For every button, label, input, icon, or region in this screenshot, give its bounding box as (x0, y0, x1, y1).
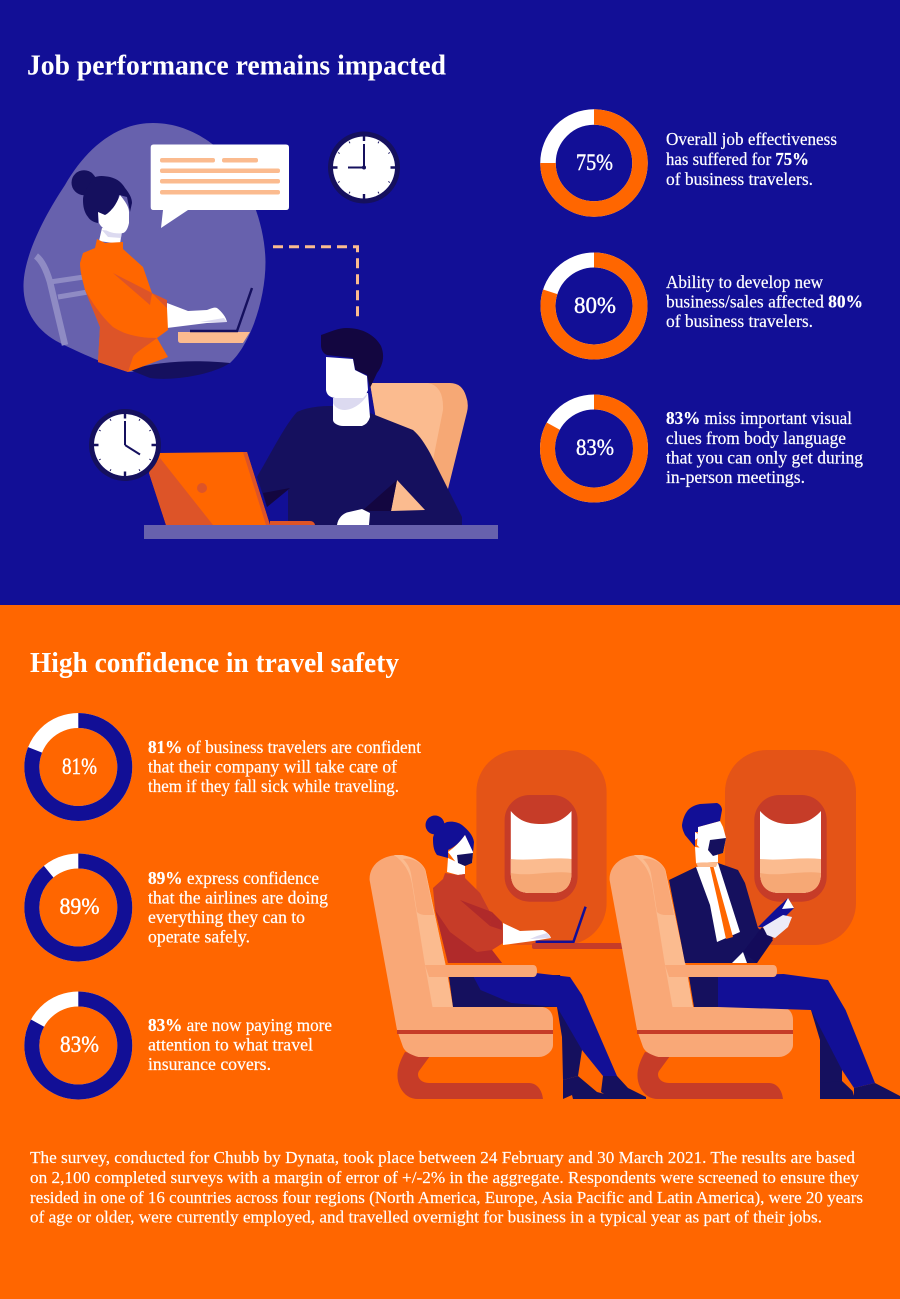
donut: 83% job: 83% (576, 435, 614, 460)
speech bubble (151, 144, 289, 228)
illustration: man passenger (669, 803, 900, 1099)
text: travel insurance: insurance covers. (148, 1054, 271, 1074)
clock: top (328, 132, 400, 204)
survey methodology note: of age or older, were currently employed, and travelled overnight for business in a typical year as part of their jobs. (30, 1208, 822, 1226)
text: job effectiveness: Overall job effectiveness (666, 129, 837, 149)
heading: job performance: Job performance remains impacted (27, 50, 446, 82)
illustration: woman on video call (23, 123, 266, 379)
armrest left (425, 965, 537, 977)
dashed connector arrow (273, 247, 358, 318)
text: new business ability: of business travelers. (666, 311, 813, 331)
text: job effectiveness: of business travelers. (666, 169, 813, 189)
text: travel insurance: attention to what travel (148, 1034, 313, 1054)
text: visual clues: 83% miss important visual (666, 408, 860, 428)
survey methodology note: The survey, conducted for Chubb by Dynata, took place between 24 February and 30 March 2021. The results are based (30, 1148, 855, 1167)
heading: travel safety: High confidence in travel safety (30, 648, 399, 679)
text: airline confidence: everything they can to (148, 907, 305, 927)
donut: 80% (548, 260, 640, 352)
text: visual clues: clues from body language (666, 428, 846, 448)
illustration: seat right (610, 855, 793, 1099)
illustration: seat left (370, 855, 553, 1099)
text: airline confidence: 89% express confidence (148, 868, 325, 888)
text: company care: them if they fall sick while traveling. (148, 776, 399, 796)
donut: 89%: 89% (60, 894, 100, 919)
text: new business ability: business/sales affected 80% (666, 292, 864, 312)
text: visual clues: in-person meetings. (666, 467, 805, 487)
donut: 83% job (548, 402, 640, 495)
tray table (532, 943, 624, 949)
survey methodology note: resided in one of 16 countries across four regions (North America, Europe, Asia Pacific and Latin America), were 20 years (30, 1188, 863, 1207)
panel: job performance (0, 0, 900, 605)
illustration: airplane window right (725, 750, 856, 945)
text: company care: that their company will take care of (148, 756, 397, 776)
text: new business ability: Ability to develop new (666, 272, 823, 292)
text: visual clues: that you can only get during (666, 448, 863, 468)
donut: 75% (548, 117, 640, 209)
donut: 81%: 81% (62, 754, 97, 779)
illustration: man at laptop (144, 328, 498, 539)
text: airline confidence: operate safely. (148, 926, 250, 946)
donut: 83% safety: 83% (60, 1032, 99, 1057)
illustration: airplane window left (476, 750, 607, 945)
donut: 89% (32, 861, 125, 954)
donut: 81% (32, 720, 125, 814)
survey methodology note: on 2,100 completed surveys with a margin of error of +/-2% in the aggregate. Respondents were screened to ensure they (30, 1168, 859, 1187)
armrest right (665, 965, 777, 977)
illustration: woman passenger (426, 816, 646, 1099)
panel: travel safety (0, 605, 900, 1299)
text: travel insurance: 83% are now paying more (148, 1015, 339, 1035)
clock: bottom (89, 409, 161, 481)
donut: 80%: 80% (574, 293, 616, 318)
text: company care: 81% of business travelers are confident (148, 737, 433, 757)
text: job effectiveness: has suffered for 75% (666, 149, 811, 169)
donut: 83% safety (32, 999, 125, 1092)
text: airline confidence: that the airlines are doing (148, 888, 328, 908)
donut: 75%: 75% (576, 150, 613, 175)
